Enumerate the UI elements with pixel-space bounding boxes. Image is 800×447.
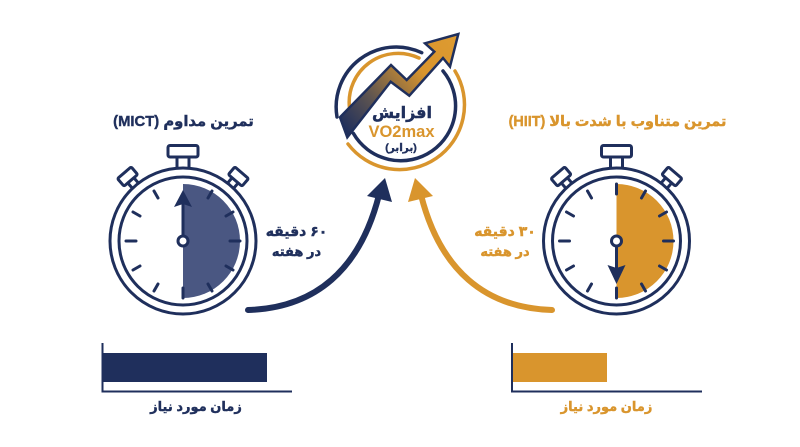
arrow: HIIT to VO2max [408, 178, 552, 310]
bar chart: MICT time required: زمان مورد نیاز [149, 399, 242, 414]
bar chart: HIIT time required [512, 343, 702, 414]
bar chart: HIIT time required: زمان مورد نیاز [560, 399, 652, 414]
badge text: افزایش [372, 105, 432, 122]
clock hand [615, 247, 618, 280]
badge text: (برابر) [385, 142, 417, 154]
badge rings [336, 47, 464, 170]
arrow: MICT to VO2max [248, 178, 392, 310]
label: 30 minutes per week: در هفته [480, 244, 530, 259]
label: 30 minutes per week [474, 223, 536, 259]
stopwatch: MICT [110, 146, 256, 314]
shaded 30 minute sector [183, 184, 240, 298]
label: 30 minutes per week: ۳۰ دقیقه [474, 223, 536, 239]
rising arrow [340, 34, 458, 137]
tick marks [126, 191, 240, 298]
label: 60 minutes per week: ۶۰ دقیقه [266, 223, 327, 239]
bar chart: MICT time required [102, 343, 292, 414]
central badge: increase VO2max [336, 34, 464, 170]
label: 60 minutes per week: در هفته [272, 244, 321, 259]
label: 60 minutes per week [266, 223, 327, 259]
heading: HIIT: تمرین متناوب با شدت بالا (HIIT) [509, 114, 726, 130]
stopwatch: HIIT [544, 146, 690, 314]
badge text [368, 105, 435, 154]
heading: MICT: تمرین مداوم (MICT) [113, 114, 254, 130]
badge text: VO2max [368, 123, 435, 141]
tick marks [560, 184, 674, 298]
clock hand [182, 200, 184, 235]
shaded 30 minute sector [616, 184, 674, 298]
